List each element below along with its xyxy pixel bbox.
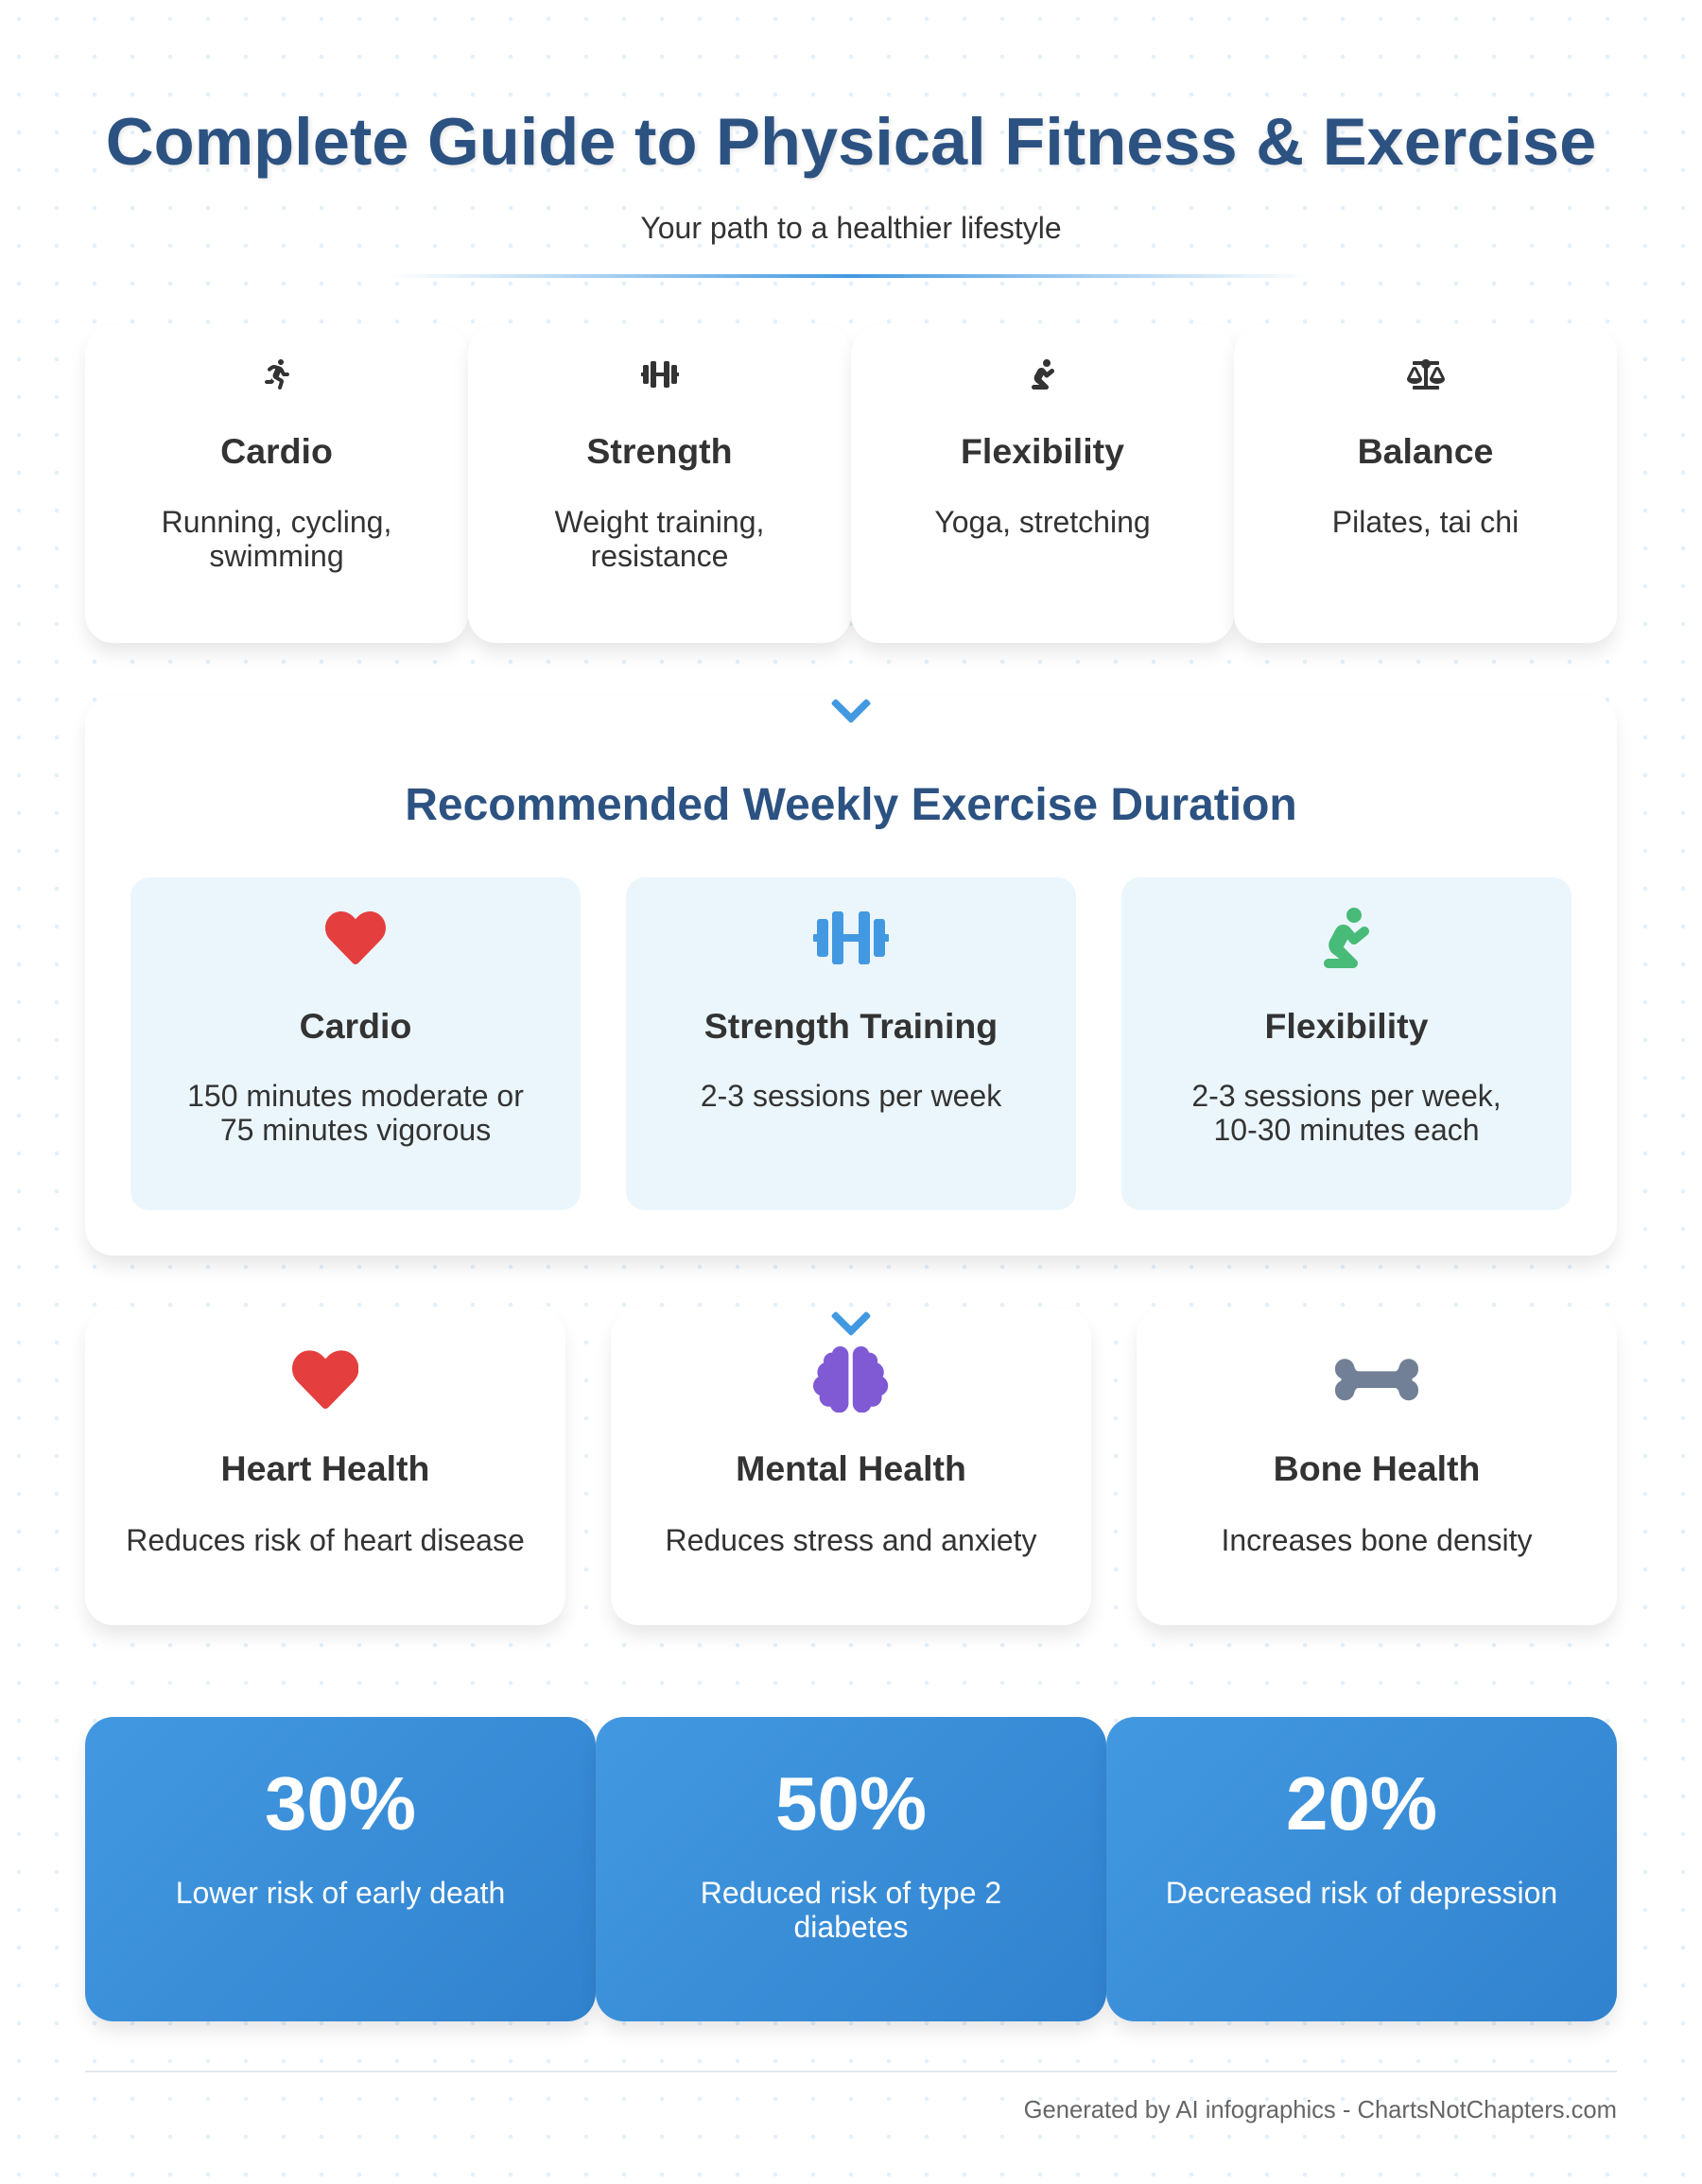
stat: type 2 diabetes [596,1717,1106,2021]
text: balance examples: Pilates, tai chi [1332,505,1519,539]
icon: grey bone [1335,1359,1418,1401]
stat: early death [85,1717,596,2021]
text: cardio examples: swimming [209,539,344,573]
arrow: chevron to benefits section [832,1312,870,1335]
card: heart health [85,1309,565,1625]
panel: exercise types row [83,348,1619,656]
card: mental health [611,1309,1091,1625]
text: bone benefit: Increases bone density [1221,1523,1533,1557]
footer rule [85,2071,1617,2072]
text: cardio duration: 150 minutes moderate or [187,1079,524,1113]
icon: blue dumbbell [813,911,889,964]
text: strength examples: Weight training, [555,505,764,539]
text: flexibility examples: Yoga, stretching [934,505,1151,539]
heading: flexibility: Flexibility [961,431,1124,471]
header divider [391,274,1311,278]
icon: red heart [292,1350,358,1409]
footer credit: Generated by AI infographics - ChartsNotChapters.com [1024,2097,1617,2123]
text: heart benefit: Reduces risk of heart disease [126,1523,525,1557]
heading: strength: Strength [586,431,733,471]
heading: weekly duration: Recommended Weekly Exercise Duration [405,779,1297,830]
stat: depression [1106,1717,1617,2021]
heading: cardio: Cardio [220,431,333,471]
text: flexibility duration: 10-30 minutes each [1213,1113,1480,1147]
label: early death: Lower risk of early death [176,1876,505,1910]
heading: heart health: Heart Health [221,1448,429,1488]
heading: cardio: Cardio [300,1006,411,1046]
card: cardio [85,325,468,643]
label: diabetes: Reduced risk of type 2 diabetes [701,1876,1001,1944]
text: strength examples [554,505,764,573]
text: strength examples: resistance [591,539,728,573]
heading: bone health: Bone Health [1274,1448,1480,1488]
card: strength duration [626,877,1076,1210]
panel: health benefits row [83,1341,1619,1638]
card: balance [1234,325,1617,643]
panel: statistics row [83,1717,1619,2035]
subtitle: Your path to a healthier lifestyle [640,211,1062,245]
label: depression: Decreased risk of depression [1166,1876,1557,1910]
text: cardio examples [162,505,391,573]
text: flexibility duration: 2-3 sessions per week, [1191,1079,1502,1113]
number: 50 percent: 50% [775,1761,927,1846]
icon: kneeling person [1032,359,1054,390]
card: strength [468,325,851,643]
heading: balance: Balance [1358,431,1493,471]
heading: mental health: Mental Health [736,1448,966,1488]
card: flexibility [851,325,1234,643]
title: Complete Guide to Physical Fitness & Exercise [106,104,1596,178]
number: 20 percent: 20% [1286,1761,1437,1846]
icon: running person [265,359,289,390]
panel: recommended weekly exercise duration [85,696,1617,1256]
text: strength duration: 2-3 sessions per week [701,1079,1001,1113]
text: flexibility duration [1191,1079,1502,1147]
card: flexibility duration [1121,877,1572,1210]
text: cardio duration: 75 minutes vigorous [220,1113,491,1147]
number: 30 percent: 30% [265,1761,416,1846]
icon: balance scale [1407,359,1445,390]
text: cardio duration [187,1079,524,1147]
card: bone health [1137,1309,1617,1625]
text: cardio examples: Running, cycling, [162,505,391,539]
icon: dumbbell [641,361,679,388]
heading: strength training: Strength Training [704,1006,998,1046]
icon: purple brain [813,1346,889,1413]
icon: red heart [325,911,386,964]
text: mental benefit: Reduces stress and anxiety [665,1523,1037,1557]
heading: flexibility: Flexibility [1265,1006,1428,1046]
arrow: chevron to duration section [832,700,870,722]
card: cardio duration [130,877,581,1210]
icon: green kneeling person [1324,908,1369,968]
